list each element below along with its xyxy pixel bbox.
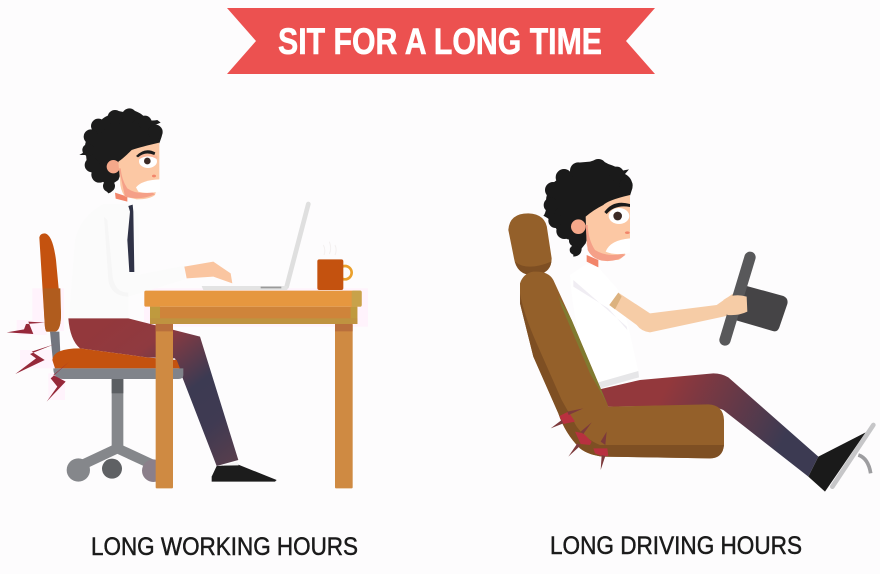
shoe [808, 432, 866, 492]
shirt [68, 204, 140, 327]
pain marks [551, 408, 608, 470]
coffee mug [317, 242, 352, 290]
hand [184, 262, 232, 283]
steering wheel [723, 257, 788, 340]
tie [127, 205, 134, 272]
trousers [68, 318, 238, 466]
label: long working hours: LONG WORKING HOURS [91, 533, 358, 561]
trousers [597, 373, 818, 477]
illustration: man driving [508, 159, 873, 492]
title banner [227, 8, 655, 74]
chair back [39, 233, 61, 332]
title banner: SIT FOR A LONG TIME [278, 21, 602, 62]
head [79, 108, 163, 202]
arm [609, 293, 747, 332]
pedal [832, 425, 873, 487]
illustration: man working at desk [7, 108, 368, 488]
headrest [508, 213, 552, 275]
shirt [570, 264, 638, 387]
pain bolts [7, 322, 69, 402]
shoe [212, 465, 277, 482]
head [543, 159, 633, 267]
label: long driving hours: LONG DRIVING HOURS [550, 532, 802, 560]
chair base [67, 379, 165, 482]
laptop [202, 204, 308, 290]
chair seat [52, 348, 180, 368]
seat [520, 272, 724, 458]
desk [144, 291, 362, 488]
